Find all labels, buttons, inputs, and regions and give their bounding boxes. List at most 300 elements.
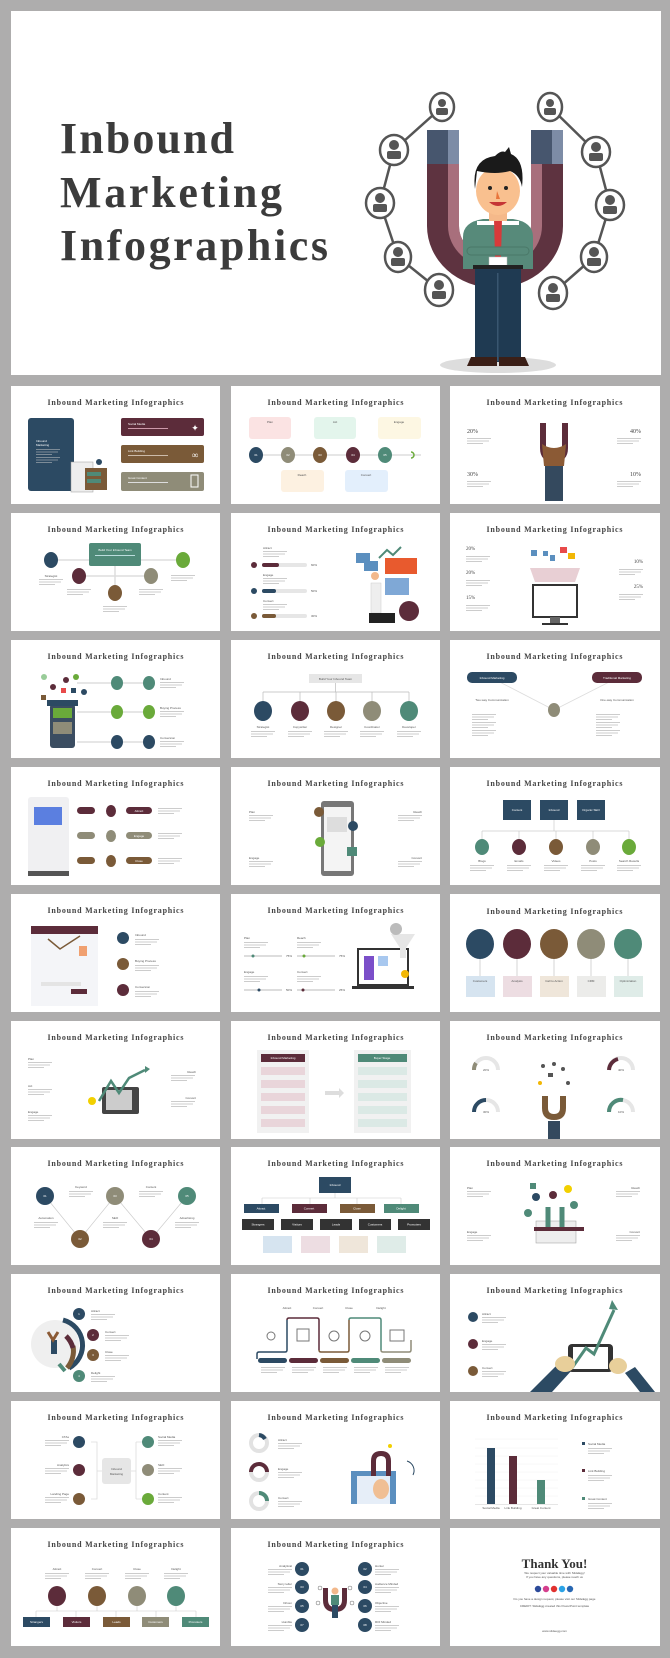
hub: Inbound — [111, 1467, 122, 1471]
slide 7: mobile icons — [11, 640, 220, 758]
column: buyer stage: Buyer Stage — [374, 1056, 391, 1060]
zigzag: Keyword — [75, 1185, 87, 1189]
slide 19: zigzag steps: Inbound Marketing Infographics — [48, 1159, 184, 1168]
zigzag: 03 — [113, 1194, 117, 1198]
snake path — [257, 1318, 411, 1359]
slide 23: snake process: Inbound Marketing Infographics — [268, 1286, 404, 1295]
steps: Close — [105, 1350, 113, 1354]
ovals with cards: Customers — [473, 979, 488, 983]
footer text — [514, 1597, 596, 1633]
team tree: Strategist — [257, 725, 269, 729]
slide 8: inbound team tree: Inbound Marketing Infographics — [268, 652, 404, 661]
team tree: Build Your Inbound Team — [319, 677, 353, 681]
zigzag: SEO — [112, 1216, 119, 1220]
slide 11: phone center: Inbound Marketing Infographics — [268, 779, 404, 788]
panel: link building: Link Building — [128, 449, 145, 453]
corner texts: Convert — [411, 856, 422, 860]
steps: 2 — [92, 1333, 94, 1337]
bar chart: Link Building — [504, 1506, 522, 1510]
steps: 3 — [92, 1353, 94, 1357]
footer text: CREDIT: SlideEgg created this PowerPoint template — [520, 1604, 590, 1608]
steps: 4 — [78, 1374, 80, 1378]
slide 23: snake process: Attract — [283, 1306, 291, 1310]
slide 29: eight steps with man — [231, 1528, 440, 1646]
steps: Attract — [91, 1309, 100, 1313]
comparison V: Two-way Communication — [475, 698, 509, 702]
timeline circles: 04 — [351, 453, 355, 457]
sliders: 50% — [286, 988, 292, 992]
slide 18: gauges and magnet: 10% — [618, 1110, 624, 1114]
top boxes: Organic SEO — [582, 808, 600, 812]
icon: hand magnet — [540, 423, 568, 501]
slide 29: eight steps with man: Inbound Marketing Infographics — [268, 1540, 404, 1549]
stats: 25% — [634, 585, 643, 590]
slide 14: sliders and laptop: Inbound Marketing Infographics — [268, 906, 404, 915]
stage boxes: Promoters — [189, 1620, 203, 1624]
hierarchy: Delight — [396, 1206, 406, 1210]
businessman — [440, 147, 556, 373]
corner texts: Engage — [249, 856, 260, 860]
zigzag — [34, 1185, 199, 1248]
slide 26: donuts and magnet laptop: Inbound Marketing Infographics — [268, 1413, 404, 1422]
slide 12: org chart circles: Inbound Marketing Infographics — [486, 779, 622, 788]
corner texts: Convert — [629, 1230, 640, 1234]
message: If you have any questions, please reach us — [526, 1575, 583, 1579]
slide 1: inbound marketing channels — [11, 386, 220, 504]
progress bars: Engage — [263, 573, 274, 577]
team box: Build Your Inbound Team — [98, 548, 132, 552]
hero title: Infographics — [60, 221, 328, 270]
sliders — [244, 936, 345, 992]
timeline circles: 02 — [286, 453, 290, 457]
team tree: Designer — [330, 725, 342, 729]
slide 15: five ovals: Inbound Marketing Infographics — [486, 907, 622, 916]
panel: social media — [121, 418, 204, 436]
hierarchy: Strangers — [251, 1222, 265, 1226]
hub with arc — [31, 1320, 83, 1371]
list: Convert — [482, 1366, 493, 1370]
timeline circles: 03 — [318, 453, 322, 457]
slide 26: donuts and magnet laptop: Attract — [278, 1438, 287, 1442]
magnet — [427, 130, 563, 288]
slide 7: mobile icons: Inbound Marketing Infographics — [48, 652, 184, 661]
timeline boxes: Engage — [394, 420, 405, 424]
slide 23: snake process — [231, 1274, 440, 1392]
illustration: marketer with media — [356, 547, 419, 623]
slide 3: hand magnet stats — [450, 386, 660, 504]
slide 18: gauges and magnet: Inbound Marketing Infographics — [486, 1033, 622, 1042]
hero title: Marketing — [60, 168, 282, 217]
slide 22: circular process — [11, 1274, 220, 1392]
steps: Audience Minded — [375, 1582, 399, 1586]
illustration: laptop funnel — [352, 923, 415, 989]
stage boxes: Leads — [112, 1620, 121, 1624]
top boxes: Inbound — [549, 808, 560, 812]
slide 24: hands with phone: Inbound Marketing Infographics — [486, 1286, 622, 1295]
hierarchy: Promoters — [407, 1222, 421, 1226]
steps: Buying Process — [135, 959, 156, 963]
team box — [89, 543, 141, 566]
slide 28: buyer journey: Inbound Marketing Infographics — [48, 1540, 184, 1549]
steps: Hunter — [375, 1564, 384, 1568]
icon: hand magnet with icons — [538, 1062, 570, 1139]
slide 26: donuts and magnet laptop — [231, 1401, 440, 1519]
illustration: phone — [28, 797, 69, 876]
slide 21: marketing illustration: Inbound Marketing Infographics — [486, 1159, 622, 1168]
slide 1: inbound marketing channels: Inbound Marketing Infographics — [48, 398, 184, 407]
steps list: Conversion — [160, 736, 176, 740]
hierarchy: Inbound — [330, 1183, 341, 1187]
slide 11: phone center — [231, 767, 440, 885]
arrow — [325, 1088, 344, 1098]
team tree: Copywriter — [293, 725, 307, 729]
slide 9: inbound vs traditional — [450, 640, 660, 758]
steps: 05 — [300, 1604, 304, 1608]
slide 4: build your inbound team — [11, 513, 220, 631]
slide 10: phone pills: Inbound Marketing Infographics — [48, 779, 184, 788]
stats: 30% — [467, 472, 478, 478]
text blocks: Reach — [187, 1070, 196, 1074]
slide 16: tablet with growth arrow: Inbound Marketing Infographics — [48, 1033, 184, 1042]
illustration: phone — [314, 801, 358, 876]
slide 27: bar chart: Inbound Marketing Infographics — [486, 1413, 622, 1422]
circles row: Videos — [551, 859, 561, 863]
panel: inbound marketing navy box: Marketing — [36, 443, 50, 447]
timeline boxes: Convert — [361, 473, 371, 477]
panel: inbound marketing navy box: Inbound — [36, 439, 47, 443]
slide 15: five ovals — [450, 894, 660, 1012]
hierarchy — [242, 1177, 430, 1253]
message: We respect your valuable time with SlideEgg! — [524, 1571, 585, 1575]
hub — [45, 1435, 182, 1505]
slide 24: hands with phone — [450, 1274, 660, 1392]
comparison V: One-way Communication — [600, 698, 634, 702]
ovals with cards: CRM — [588, 979, 595, 983]
timeline circles: 05 — [383, 453, 387, 457]
slide 23: snake process: Convert — [313, 1306, 323, 1310]
stats: 20% — [466, 571, 475, 576]
footer text: www.slideegg.com — [542, 1629, 567, 1633]
panel: social media: Social Media — [128, 422, 146, 426]
progress bars: Attract — [263, 546, 272, 550]
illustration: website — [71, 459, 107, 492]
circles row — [470, 820, 641, 871]
panel: inbound marketing navy box — [28, 418, 74, 491]
corner texts: Reach — [413, 810, 422, 814]
steps: Story teller — [278, 1582, 292, 1586]
slide 22: circular process: Inbound Marketing Infographics — [48, 1286, 184, 1295]
footer text: Do you have a design request, please visit our SlideEgg page — [514, 1597, 596, 1601]
slide 12: org chart circles — [450, 767, 660, 885]
slide 21: marketing illustration — [450, 1147, 660, 1265]
thank you heading: Thank You! — [522, 1556, 587, 1571]
hierarchy: Visitors — [292, 1222, 302, 1226]
steps: Objective — [375, 1601, 388, 1605]
steps: 01 — [300, 1567, 304, 1571]
hub: Analytics — [57, 1463, 69, 1467]
corner texts: Plan — [467, 1186, 473, 1190]
stage boxes — [23, 1606, 209, 1627]
text blocks: Act — [28, 1084, 33, 1088]
progress bars: 30% — [311, 614, 317, 618]
team tree: Coordinator — [364, 725, 380, 729]
corner texts — [467, 1186, 640, 1241]
slide 17: two columns: Inbound Marketing Infographics — [268, 1033, 404, 1042]
stats: 10% — [630, 472, 641, 478]
column: inbound marketing: Inbound Marketing — [271, 1056, 296, 1060]
comparison V: Traditional Marketing — [603, 676, 631, 680]
slide 26: donuts and magnet laptop: Engage — [278, 1467, 289, 1471]
stages top: Delight — [171, 1567, 181, 1571]
stage boxes: Visitors — [72, 1620, 82, 1624]
panel: great content — [121, 472, 204, 491]
hero title: Inbound — [60, 114, 234, 163]
progress bars: Convert — [263, 599, 274, 603]
donuts — [251, 1435, 267, 1509]
illustration: storefront — [31, 926, 98, 1006]
zigzag: Content — [146, 1185, 156, 1189]
corner texts: Reach — [631, 1186, 640, 1190]
ovals with cards: Analysis — [511, 979, 523, 983]
network of people icons — [366, 93, 624, 309]
hub: Marketing — [110, 1472, 123, 1476]
slide 28: buyer journey — [11, 1528, 220, 1646]
slide 6: box and monitor: Inbound Marketing Infographics — [486, 525, 622, 534]
top boxes: Content — [512, 808, 522, 812]
column: inbound marketing — [257, 1050, 309, 1133]
column: buyer stage — [354, 1050, 411, 1133]
slide 13: website conversion — [11, 894, 220, 1012]
slide 30: thank you — [450, 1528, 660, 1646]
sliders: 25% — [339, 988, 345, 992]
hierarchy: Leads — [332, 1222, 341, 1226]
stages top: Close — [133, 1567, 141, 1571]
illustration: tablet and arrow — [88, 1066, 150, 1114]
steps: 04 — [363, 1585, 367, 1589]
zigzag: 05 — [185, 1194, 189, 1198]
sliders: 75% — [339, 954, 345, 958]
stats: 20% — [466, 547, 475, 552]
illustration: hands holding phone — [530, 1300, 655, 1392]
social icons — [535, 1586, 573, 1592]
stats — [467, 429, 641, 487]
zigzag: 02 — [78, 1237, 82, 1241]
stages top: Attract — [53, 1567, 61, 1571]
hero title — [60, 114, 328, 270]
steps: 06 — [363, 1604, 367, 1608]
steps: Driven — [283, 1601, 292, 1605]
slide 4: build your inbound team: Inbound Marketing Infographics — [48, 525, 184, 534]
slide 3: hand magnet stats: Inbound Marketing Infographics — [486, 398, 622, 407]
list — [468, 1312, 506, 1377]
steps: Inbound — [135, 933, 146, 937]
slide 18: gauges and magnet: 20% — [483, 1068, 489, 1072]
legend: Link Building — [588, 1469, 605, 1473]
steps: 1 — [78, 1312, 80, 1316]
timeline boxes: Act — [333, 420, 337, 424]
pills — [77, 805, 182, 867]
message — [524, 1571, 585, 1579]
stats: 10% — [634, 560, 643, 565]
slide 16: tablet with growth arrow — [11, 1021, 220, 1139]
panel: link building: ∞ — [192, 450, 198, 460]
gauges — [474, 1058, 633, 1112]
stage boxes: Strangers — [30, 1620, 43, 1624]
illustration: box and monitor — [530, 547, 580, 625]
legend: Social Media — [588, 1442, 606, 1446]
slide 2: timeline: Inbound Marketing Infographics — [268, 398, 404, 407]
slide 27: bar chart — [450, 1401, 660, 1519]
legend — [582, 1442, 612, 1509]
timeline boxes: Reach — [298, 473, 307, 477]
progress bars: 60% — [311, 563, 317, 567]
panel: link building — [121, 445, 204, 463]
slide 8: inbound team tree — [231, 640, 440, 758]
circles row: Search Results — [619, 859, 640, 863]
hub: SEO — [158, 1463, 165, 1467]
stages top: Convert — [92, 1567, 102, 1571]
slide 6: box and monitor — [450, 513, 660, 631]
slide 25: inbound marketing hub — [11, 1401, 220, 1519]
sliders: Reach — [297, 936, 306, 940]
pills: Attract — [135, 809, 143, 813]
panel: social media: ✦ — [191, 423, 199, 433]
text blocks: Engage — [28, 1110, 39, 1114]
team circles: Strategist — [45, 574, 57, 578]
steps list: Inbound — [160, 677, 171, 681]
progress bars: 50% — [311, 589, 317, 593]
illustration: phone with icons — [41, 674, 87, 748]
slide 5: progress bars: Inbound Marketing Infographics — [268, 525, 404, 534]
icon: man with magnet — [316, 1586, 354, 1618]
steps list — [77, 676, 184, 749]
slide 26: donuts and magnet laptop: Convert — [278, 1496, 289, 1500]
zigzag: Automation — [38, 1216, 54, 1220]
hierarchy: Customers — [368, 1222, 383, 1226]
ovals with cards — [466, 929, 643, 997]
slide 23: snake process: Close — [345, 1306, 353, 1310]
team tree — [251, 674, 421, 737]
steps: 02 — [363, 1567, 367, 1571]
panel: great content: Great Content — [128, 476, 147, 480]
text blocks: Convert — [185, 1096, 196, 1100]
ovals with cards: Optimization — [620, 979, 637, 983]
slide 2: timeline — [231, 386, 440, 504]
slide 9: inbound vs traditional: Inbound Marketing Infographics — [486, 652, 622, 661]
slide 20: org hierarchy: Inbound Marketing Infographics — [268, 1159, 404, 1168]
sliders: Convert — [297, 970, 308, 974]
top boxes — [503, 800, 605, 820]
stats — [466, 547, 643, 611]
text blocks — [28, 1057, 196, 1121]
bar chart: Great Content — [532, 1506, 551, 1510]
pills: Close — [135, 859, 143, 863]
progress bars — [251, 546, 317, 619]
steps: Convert — [105, 1330, 116, 1334]
slide 20: org hierarchy — [231, 1147, 440, 1265]
comparison V: Inbound Marketing — [480, 676, 505, 680]
zigzag: 01 — [43, 1194, 47, 1198]
stages top — [45, 1567, 188, 1606]
hub: Landing Page — [50, 1492, 69, 1496]
circles row: Blogs — [478, 859, 486, 863]
team circles — [39, 552, 195, 612]
bar chart: Social Media — [482, 1506, 500, 1510]
list: Engage — [482, 1339, 493, 1343]
hub: Content — [158, 1492, 169, 1496]
slide 23: snake process: Delight — [376, 1306, 386, 1310]
stats: 40% — [630, 429, 641, 435]
bar chart — [475, 1439, 558, 1510]
steps: Delight — [91, 1371, 101, 1375]
list: Attract — [482, 1312, 491, 1316]
slide 18: gauges and magnet: 40% — [618, 1068, 624, 1072]
zigzag: 04 — [149, 1237, 153, 1241]
steps list: Buying Process — [160, 706, 181, 710]
timeline boxes — [249, 417, 421, 492]
stats: 15% — [466, 596, 475, 601]
team tree: Developer — [402, 725, 416, 729]
steps: 03 — [300, 1585, 304, 1589]
illustration — [524, 1183, 584, 1243]
steps — [117, 932, 159, 997]
hierarchy: Attract — [257, 1206, 265, 1210]
sliders: Engage — [244, 970, 255, 974]
corner texts: Engage — [467, 1230, 478, 1234]
slide 18: gauges and magnet — [450, 1021, 660, 1139]
sliders: Plan — [244, 936, 250, 940]
pills: Engage — [134, 834, 145, 838]
hero slide — [11, 11, 661, 375]
stage labels — [258, 1358, 411, 1373]
steps — [73, 1308, 129, 1382]
timeline boxes: Plan — [267, 420, 273, 424]
zigzag: Advertising — [180, 1216, 195, 1220]
slide 19: zigzag steps — [11, 1147, 220, 1265]
slide 5: progress bars — [231, 513, 440, 631]
slide 14: sliders and laptop — [231, 894, 440, 1012]
text blocks: Plan — [28, 1057, 34, 1061]
sliders: 75% — [286, 954, 292, 958]
slide 13: website conversion: Inbound Marketing Infographics — [48, 906, 184, 915]
ovals with cards: Call to Action — [545, 979, 563, 983]
steps: 08 — [363, 1623, 367, 1627]
steps: Analytical — [279, 1564, 292, 1568]
slide 25: inbound marketing hub: Inbound Marketing Infographics — [48, 1413, 184, 1422]
steps: Conversion — [135, 985, 151, 989]
hierarchy: Close — [353, 1206, 361, 1210]
timeline circles — [249, 447, 421, 463]
steps: ROI Minded — [375, 1620, 391, 1624]
legend: Great Content — [588, 1497, 607, 1501]
slide 18: gauges and magnet: 30% — [483, 1110, 489, 1114]
illustration: magnet laptop — [351, 1444, 414, 1504]
slide 17: two columns — [231, 1021, 440, 1139]
stats: 20% — [467, 429, 478, 435]
hub: Social Media — [158, 1435, 176, 1439]
steps: 07 — [300, 1623, 304, 1627]
circles row: Emails — [514, 859, 524, 863]
comparison V — [467, 672, 642, 736]
stage boxes: Customers — [148, 1620, 163, 1624]
timeline circles: 01 — [254, 453, 258, 457]
hierarchy: Convert — [304, 1206, 314, 1210]
steps — [268, 1562, 399, 1632]
hub: CTAs — [62, 1435, 69, 1439]
circles row: Posts — [589, 859, 597, 863]
steps: Humble — [282, 1620, 292, 1624]
slide 10: phone pills — [11, 767, 220, 885]
